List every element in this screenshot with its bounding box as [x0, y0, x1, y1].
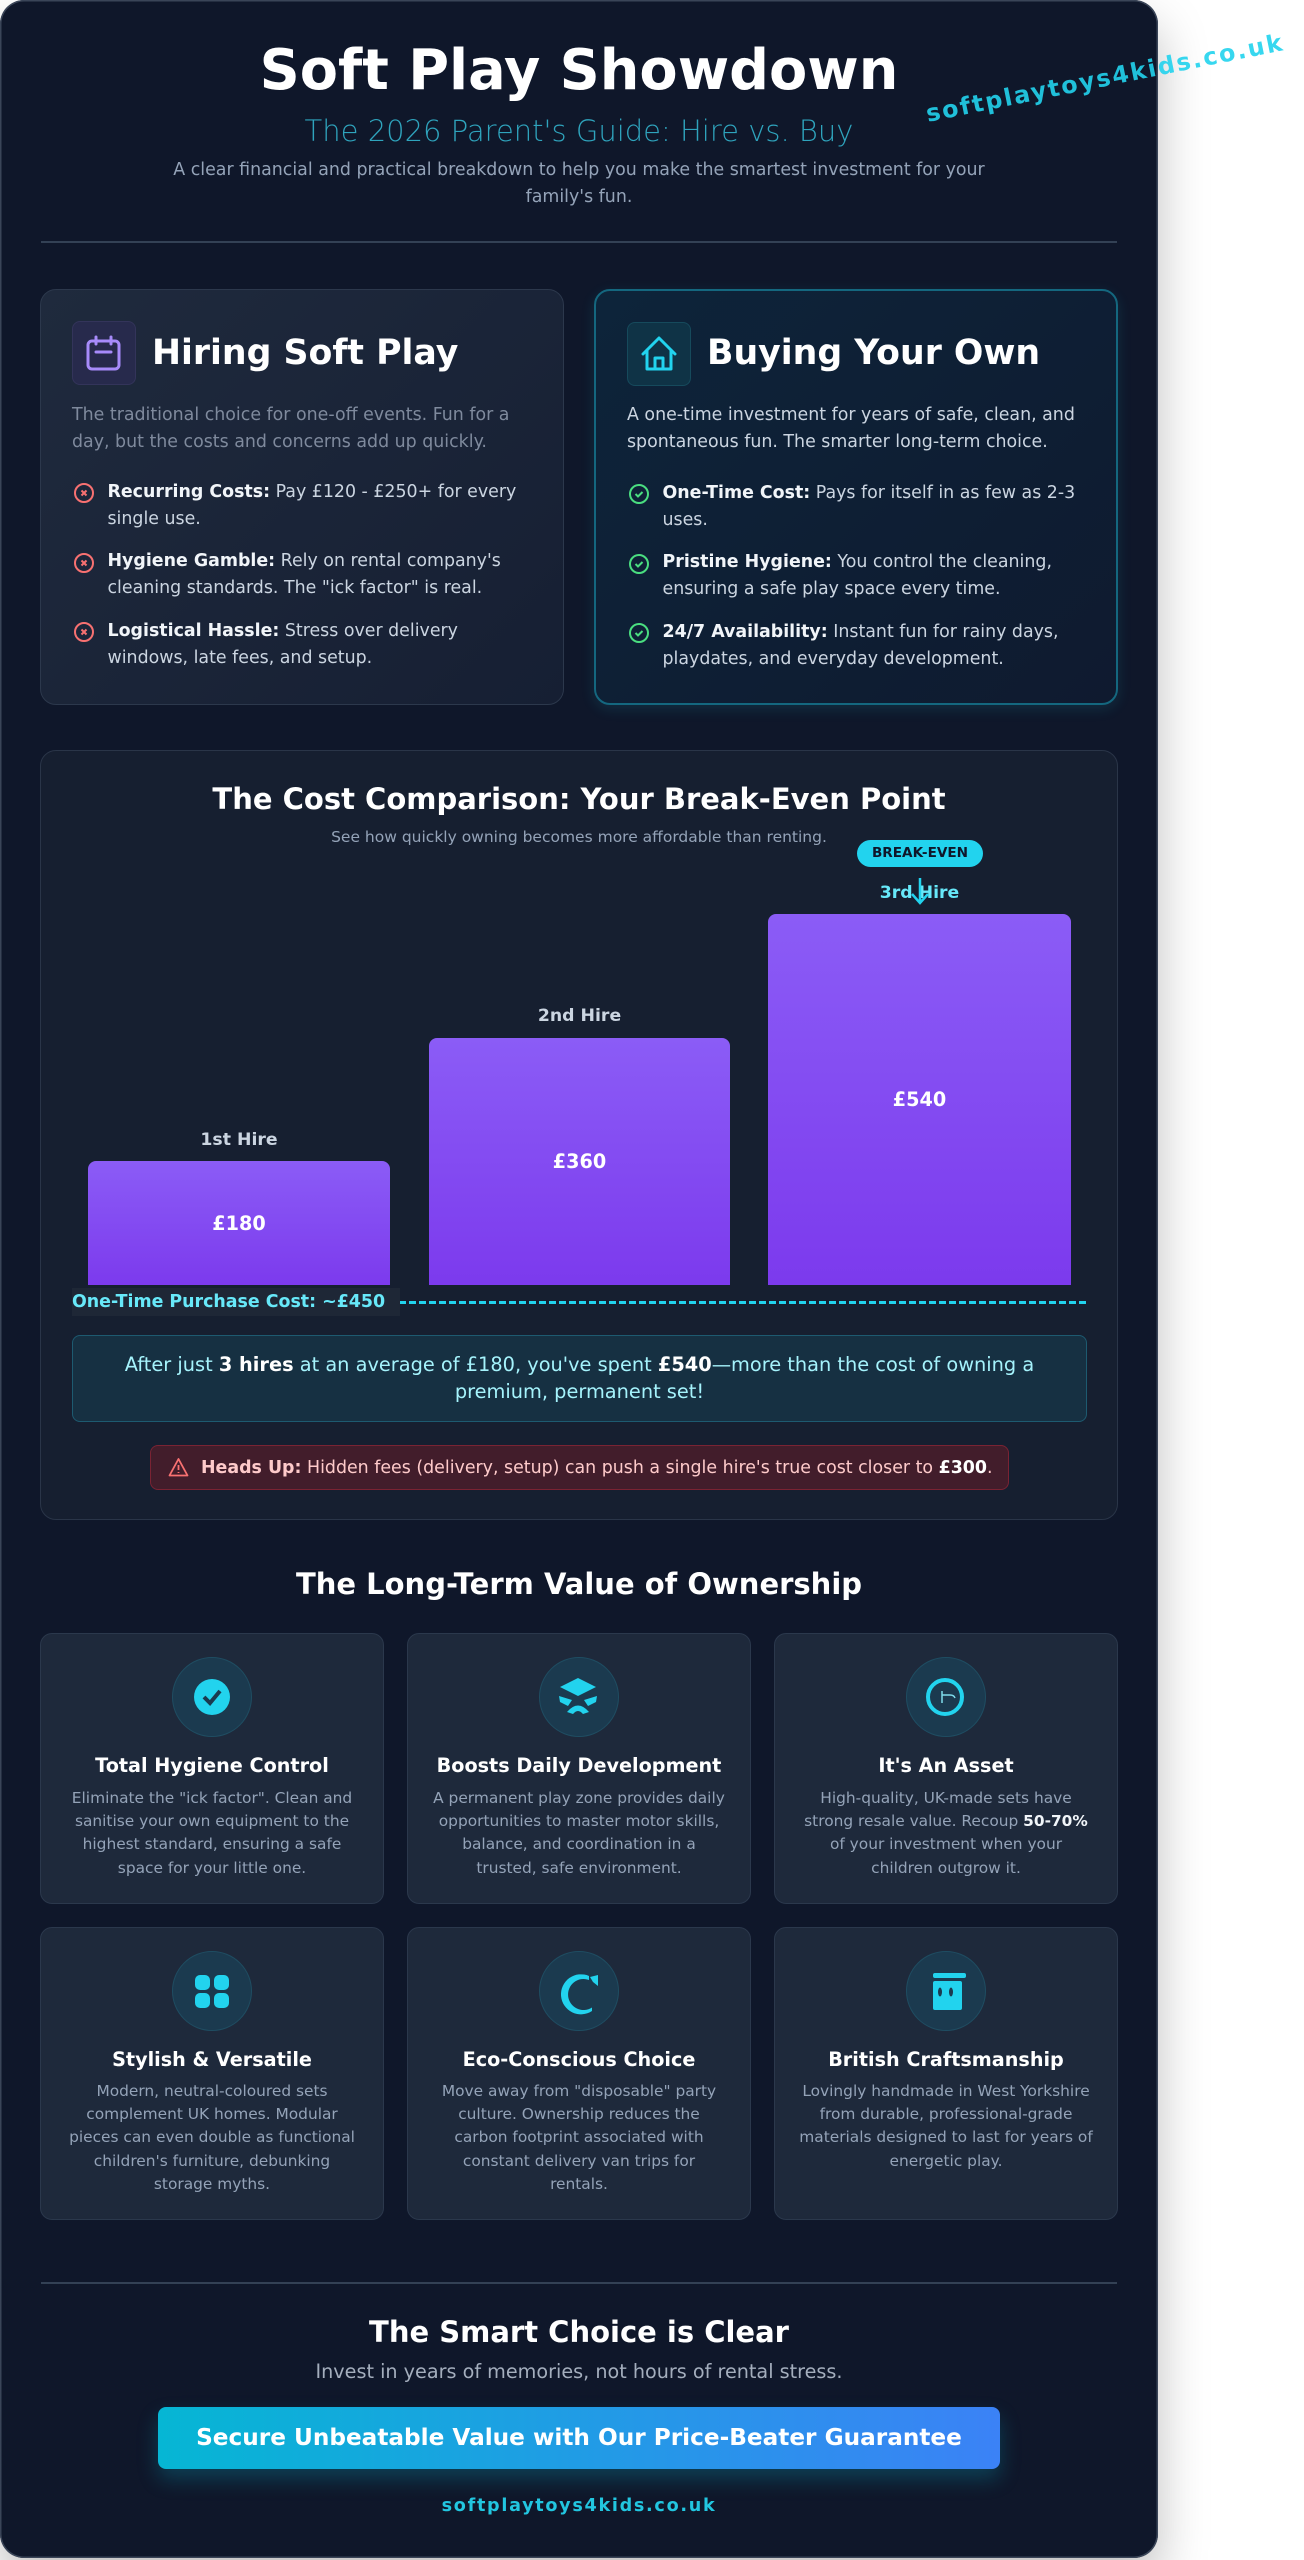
text: constant delivery van trips for	[463, 2152, 695, 2170]
bar: 1st hire	[88, 1161, 390, 1285]
title: Eco-Conscious Choice	[463, 2048, 695, 2071]
title: Total Hygiene Control	[95, 1754, 329, 1777]
purchase cost label	[72, 1288, 400, 1316]
text	[799, 2082, 1094, 2170]
text: Modern, neutral-coloured sets	[96, 2082, 328, 2100]
intro text	[173, 160, 985, 207]
call to action button: Secure Unbeatable Value with Our Price-Beater Guarantee	[196, 2424, 962, 2451]
panel: cost comparison	[40, 750, 1118, 1520]
text: High-quality, UK-made sets have	[820, 1789, 1072, 1807]
icon: recycle arrow	[539, 1951, 619, 2031]
callout	[72, 1335, 1087, 1422]
text: strong resale value. Recoup 50-70%	[804, 1812, 1088, 1830]
bar: 2nd hire	[429, 1038, 730, 1285]
warning	[150, 1445, 1009, 1490]
title: British Craftsmanship	[828, 2048, 1064, 2071]
icon: grid	[172, 1951, 252, 2031]
purchase cost label: One-Time Purchase Cost: ~£450	[72, 1292, 385, 1312]
item: hygiene gamble: Hygiene Gamble: Rely on rental company's	[108, 551, 501, 571]
item: hygiene gamble: cleaning standards. The "ick factor" is real.	[108, 578, 482, 598]
label: 1st hire: 1st Hire	[200, 1130, 278, 1150]
item: one-time cost: uses.	[662, 510, 708, 530]
text	[442, 2082, 716, 2193]
text: children's furniture, debunking	[94, 2152, 330, 2170]
text: carbon footprint associated with	[454, 2128, 704, 2146]
text: highest standard, ensuring a safe	[83, 1835, 341, 1853]
description: The traditional choice for one-off events. Fun for a	[72, 405, 509, 425]
heading: The Cost Comparison: Your Break-Even Point	[212, 782, 946, 816]
label: 2nd hire: 2nd Hire	[538, 1006, 621, 1026]
panel: buying your own	[594, 289, 1118, 705]
icon: value dial	[906, 1657, 986, 1737]
title: It's An Asset	[878, 1754, 1014, 1777]
text: materials designed to last for years of	[799, 2128, 1093, 2146]
intro text: A clear financial and practical breakdown to help you make the smartest investment for your	[173, 160, 985, 180]
item: recurring costs: single use.	[108, 508, 201, 528]
closing heading: The Smart Choice is Clear	[369, 2315, 789, 2349]
feature: boosts daily development	[407, 1633, 751, 1904]
title: Soft Play Showdown	[260, 38, 898, 103]
item: recurring costs: Recurring Costs: Pay £120 - £250+ for every	[108, 482, 516, 502]
description: A one-time investment for years of safe, clean, and	[627, 405, 1075, 425]
text: trusted, safe environment.	[476, 1859, 682, 1877]
icon: academic cap	[539, 1657, 619, 1737]
warning: Heads Up: Hidden fees (delivery, setup) can push a single hire's true cost closer to £300.	[201, 1458, 993, 1478]
text: Lovingly handmade in West Yorkshire	[802, 2082, 1090, 2100]
description	[72, 405, 509, 452]
text: Eliminate the "ick factor". Clean and	[72, 1789, 352, 1807]
text: A permanent play zone provides daily	[433, 1789, 725, 1807]
item: pristine hygiene	[629, 552, 1052, 599]
text: Move away from "disposable" party	[442, 2082, 716, 2100]
break-even badge	[857, 840, 983, 867]
icon: calendar	[72, 321, 136, 385]
text: storage myths.	[154, 2175, 270, 2193]
item: one-time cost: One-Time Cost: Pays for itself in as few as 2-3	[662, 482, 1075, 502]
bar chart	[88, 840, 1071, 1285]
text: complement UK homes. Modular	[86, 2105, 338, 2123]
text: from durable, professional-grade	[820, 2105, 1072, 2123]
subtitle: The 2026 Parent's Guide: Hire vs. Buy	[305, 114, 853, 148]
item: pristine hygiene: ensuring a safe play space every time.	[662, 579, 1000, 599]
feature: british craftsmanship	[774, 1927, 1118, 2220]
bar: 3rd hire	[768, 914, 1071, 1285]
purchase cost line	[72, 1292, 1086, 1312]
feature: it's an asset	[774, 1633, 1118, 1904]
label: 3rd hire: 3rd Hire	[880, 883, 959, 903]
icon: workshop	[906, 1951, 986, 2031]
feature: stylish and versatile	[40, 1927, 384, 2220]
text	[72, 1789, 352, 1877]
item: 24/7 availability	[629, 622, 1058, 668]
heading: Hiring Soft Play	[152, 333, 458, 373]
closing text: Invest in years of memories, not hours of rental stress.	[315, 2360, 843, 2383]
text: pieces can even double as functional	[69, 2128, 355, 2146]
item: recurring costs	[74, 482, 516, 528]
panel: hiring soft play	[40, 289, 564, 705]
item: logistical hassle: Logistical Hassle: Stress over delivery	[108, 620, 458, 640]
call to action button	[158, 2407, 1000, 2469]
text	[69, 2082, 355, 2193]
item: one-time cost	[629, 482, 1075, 530]
subheading: See how quickly owning becomes more affordable than renting.	[331, 828, 827, 846]
text: rentals.	[550, 2175, 608, 2193]
item: hygiene gamble	[74, 551, 501, 598]
intro text: family's fun.	[526, 187, 632, 207]
callout: After just 3 hires at an average of £180, you've spent £540—more than the cost of owning a	[125, 1353, 1034, 1376]
text: space for your little one.	[118, 1859, 306, 1877]
text: culture. Ownership reduces the	[458, 2105, 700, 2123]
description: spontaneous fun. The smarter long-term choice.	[627, 432, 1048, 452]
icon: house	[627, 322, 691, 386]
text: energetic play.	[890, 2152, 1002, 2170]
text	[804, 1789, 1088, 1877]
item: 24/7 availability: playdates, and everyday development.	[662, 648, 1004, 668]
item: 24/7 availability: 24/7 Availability: Instant fun for rainy days,	[662, 622, 1058, 642]
feature: eco-conscious choice	[407, 1927, 751, 2220]
icon: warning triangle	[168, 1458, 188, 1476]
heading: Buying Your Own	[707, 333, 1040, 373]
footer website: softplaytoys4kids.co.uk	[442, 2496, 716, 2516]
watermark: softplaytoys4kids.co.uk	[923, 28, 1287, 128]
feature: total hygiene control	[40, 1633, 384, 1904]
description	[627, 405, 1075, 452]
item: logistical hassle: windows, late fees, and setup.	[108, 648, 372, 668]
text	[433, 1789, 725, 1877]
text: children outgrow it.	[871, 1859, 1021, 1877]
text: balance, and coordination in a	[462, 1835, 696, 1853]
break-even badge: BREAK-EVEN	[872, 845, 968, 861]
arrow	[911, 878, 929, 905]
value: 2nd hire: £360	[553, 1150, 606, 1172]
text: of your investment when your	[830, 1835, 1062, 1853]
icon: check badge	[172, 1657, 252, 1737]
callout: premium, permanent set!	[455, 1380, 704, 1403]
title: Boosts Daily Development	[437, 1754, 721, 1777]
value: 1st hire: £180	[212, 1212, 266, 1234]
text: sanitise your own equipment to the	[75, 1812, 349, 1830]
section heading: The Long-Term Value of Ownership	[296, 1567, 862, 1601]
item: logistical hassle	[74, 620, 458, 668]
value: 3rd hire: £540	[893, 1088, 946, 1111]
item: pristine hygiene: Pristine Hygiene: You control the cleaning,	[662, 552, 1052, 572]
text: opportunities to master motor skills,	[439, 1812, 719, 1830]
description: day, but the costs and concerns add up quickly.	[72, 432, 487, 452]
title: Stylish & Versatile	[112, 2048, 312, 2071]
